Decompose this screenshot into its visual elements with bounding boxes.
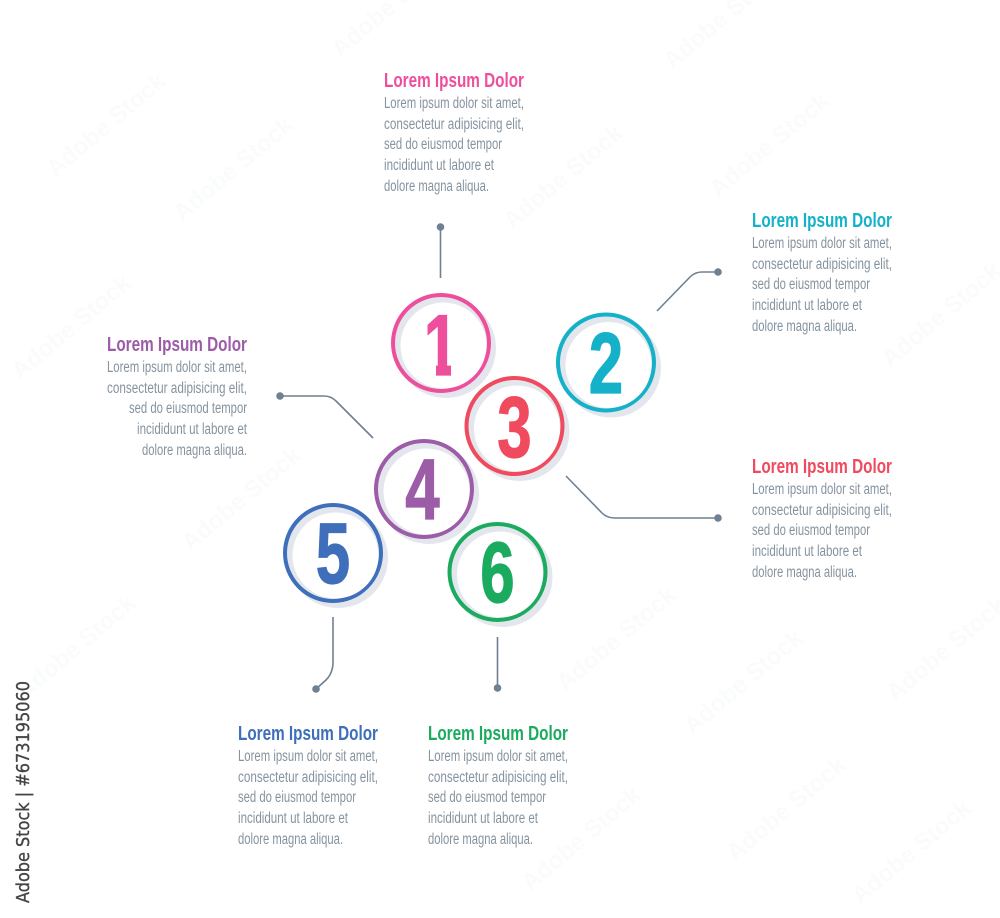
text block 6: sed do eiusmod tempor [428,789,546,806]
connector 2 [657,269,721,311]
infographic canvas: Adobe Stock [177,441,307,557]
text block 5 [238,723,378,848]
text block 5: consectetur adipisicing elit, [238,769,378,786]
text block 2: Lorem Ipsum Dolor [752,210,892,232]
text block 1: sed do eiusmod tempor [384,136,502,153]
text block 2: consectetur adipisicing elit, [752,256,892,273]
connector 4 [277,393,373,438]
text block 6: incididunt ut labore et [428,810,539,827]
text block 2: incididunt ut labore et [752,297,863,314]
circle 3: 3 [497,379,532,475]
circle 1 [393,295,496,398]
text block 4: Lorem Ipsum Dolor [107,334,247,356]
circle 6: 6 [480,524,515,620]
connector 6 [494,637,500,691]
text block 6: Lorem Ipsum Dolor [428,723,568,745]
text block 1 [384,70,524,195]
infographic canvas [15,72,892,904]
circle 1: 1 [424,297,458,393]
circle 5: 5 [316,505,350,601]
infographic canvas: Adobe Stock [42,67,172,183]
circle 3 [466,378,570,481]
text block 4: sed do eiusmod tempor [129,400,247,417]
circle 4 [376,441,479,544]
text block 4: incididunt ut labore et [137,421,248,438]
text block 4 [107,334,248,459]
stock id caption: Adobe Stock | #673195060 [13,681,34,903]
text block 6: dolore magna aliqua. [428,831,533,848]
text block 1: Lorem ipsum dolor sit amet, [384,95,524,112]
text block 3 [752,456,892,581]
connector 5 [313,617,333,692]
text block 4: dolore magna aliqua. [142,442,247,459]
infographic canvas: Adobe Stock [722,751,852,867]
text block 2: Lorem ipsum dolor sit amet, [752,235,892,252]
text block 3: dolore magna aliqua. [752,564,857,581]
circle 4: 4 [405,441,440,537]
infographic canvas: Adobe Stock [679,624,809,740]
text block 2: dolore magna aliqua. [752,318,857,335]
text block 5: Lorem ipsum dolor sit amet, [238,748,378,765]
text block 4: Lorem ipsum dolor sit amet, [107,359,247,376]
text block 3: consectetur adipisicing elit, [752,502,892,519]
infographic canvas: Adobe Stock [847,794,977,910]
text block 1: consectetur adipisicing elit, [384,116,524,133]
text block 4: consectetur adipisicing elit, [107,380,247,397]
text block 2 [752,210,892,335]
connector 1 [438,224,444,278]
text block 6 [428,723,568,848]
text block 1: dolore magna aliqua. [384,178,489,195]
infographic canvas: Adobe Stock [12,589,142,705]
circle 2: 2 [589,315,623,411]
text block 3: Lorem Ipsum Dolor [752,456,892,478]
text block 5: dolore magna aliqua. [238,831,343,848]
text block 1: Lorem Ipsum Dolor [384,70,524,92]
infographic canvas: Adobe Stock [552,581,682,697]
circle 6 [450,524,552,627]
text block 6: consectetur adipisicing elit, [428,769,568,786]
text block 3: sed do eiusmod tempor [752,522,870,539]
text block 3: incididunt ut labore et [752,543,863,560]
infographic canvas: Adobe Stock [169,111,299,227]
text block 6: Lorem ipsum dolor sit amet, [428,748,568,765]
text block 5: Lorem Ipsum Dolor [238,723,378,745]
text block 5: sed do eiusmod tempor [238,789,356,806]
circle 5 [285,505,388,608]
text block 1: incididunt ut labore et [384,157,495,174]
infographic canvas: Adobe Stock [7,269,137,385]
infographic canvas: Adobe Stock [517,781,647,897]
text block 5: incididunt ut labore et [238,810,349,827]
connector 3 [566,476,721,521]
infographic canvas: Adobe Stock [499,119,629,235]
text block 3: Lorem ipsum dolor sit amet, [752,481,892,498]
circle 2 [558,314,661,418]
infographic canvas: Adobe Stock [705,87,835,203]
text block 2: sed do eiusmod tempor [752,276,870,293]
